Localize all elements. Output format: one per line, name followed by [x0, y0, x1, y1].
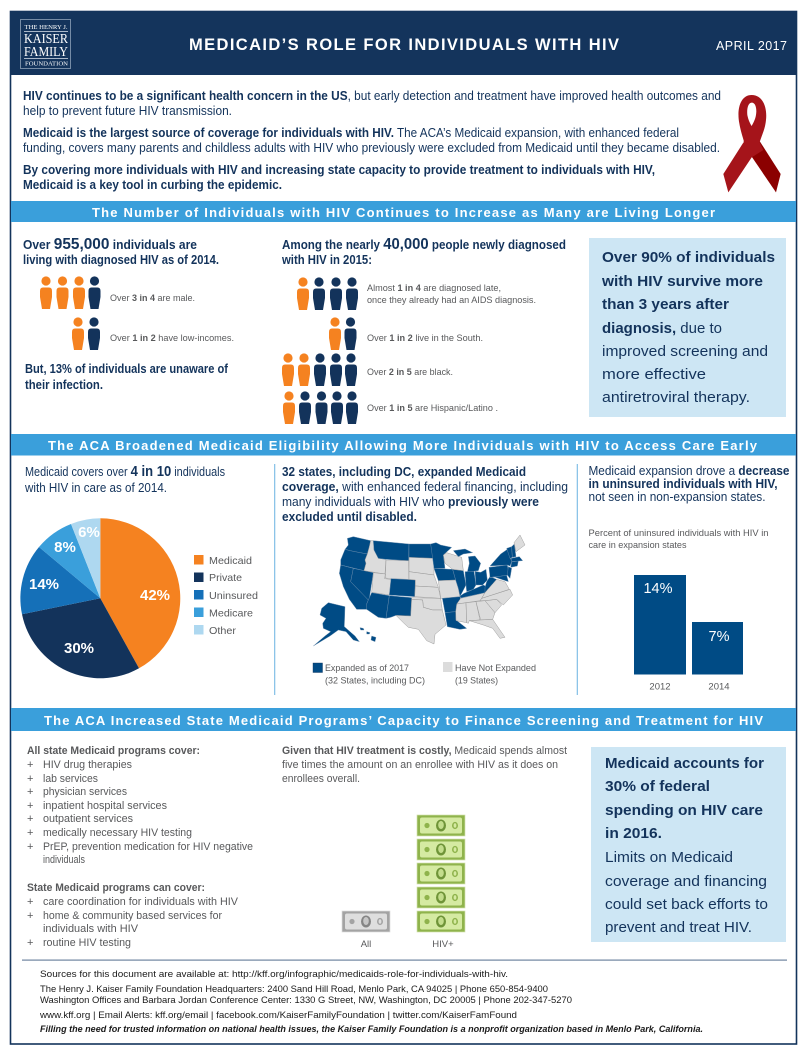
pictogram: 1 in 2 low-income — [72, 317, 234, 350]
section heading: number of individuals — [11, 201, 796, 222]
footer: sources and contacts: The Henry J. Kaiser Family Foundation Headquarters: 2400 Sand Hill Road, Menlo Park, CA 94025 | Phone 650-854-9400 — [40, 984, 548, 995]
intro text block: By covering more individuals with HIV and increasing state capacity to provide treatment to individuals with HIV, — [23, 163, 655, 177]
footer: sources and contacts — [39, 969, 703, 1035]
text: 32 states expanded: coverage, with enhanced federal financing, including — [282, 480, 568, 494]
bar chart: uninsured — [634, 575, 743, 692]
list: all state programs cover: + — [27, 841, 33, 853]
list: all state programs cover: + — [27, 759, 33, 771]
section heading: state capacity: The ACA Increased State Medicaid Programs’ Capacity to Finance Screening and Treatment for HIV — [44, 713, 763, 728]
text: 4 in 10 — [24, 463, 225, 495]
list: state programs can cover: individuals with HIV — [43, 923, 139, 935]
callout: 30% of federal spending: prevent and treat HIV. — [605, 919, 752, 936]
list: all state programs cover: lab services — [43, 773, 98, 785]
pictogram: 2 in 5 black: Over 2 in 5 are black. — [367, 367, 453, 378]
callout: 30% of federal spending: spending on HIV care — [605, 802, 763, 819]
bar chart caption: Percent of uninsured individuals with HIV in — [588, 528, 768, 539]
logo: Kaiser Family Foundation: FOUNDATION — [25, 62, 69, 68]
logo: Kaiser Family Foundation: KAISER — [24, 32, 69, 47]
map legend: Have Not Expanded — [455, 663, 536, 674]
text: 40,000 newly diagnosed — [281, 236, 566, 267]
US map: Medicaid expansion — [313, 535, 525, 646]
text: 13% unaware: But, 13% of individuals are unaware of — [25, 362, 229, 376]
list: all state programs cover: All state Medicaid programs cover: — [27, 745, 200, 757]
callout: 90% survive: Over 90% of individuals — [602, 249, 775, 266]
footer: sources and contacts: Washington Offices and Barbara Jordan Conference Center: 1330 G Street, NW, Washington, DC 20005 | Phone 202-347-5270 — [40, 995, 572, 1006]
text: treatment cost — [282, 745, 567, 785]
pie chart: coverage — [20, 518, 180, 678]
icon: red AIDS ribbon — [723, 95, 781, 192]
map legend: Expanded as of 2017 — [325, 663, 409, 674]
text: 32 states expanded — [282, 465, 568, 524]
bar chart: uninsured: 2012 — [649, 682, 671, 692]
text: 4 in 10: with HIV in care as of 2014. — [24, 481, 167, 495]
pie chart: coverage: 42% — [140, 587, 170, 604]
list: all state programs cover: PrEP, prevention medication for HIV negative — [43, 841, 253, 853]
list: all state programs cover: + — [27, 786, 33, 798]
callout: 90% survive — [589, 238, 786, 417]
list: all state programs cover: individuals — [43, 854, 85, 866]
text: decrease in uninsured: not seen in non-expansion states. — [588, 490, 766, 504]
callout: 90% survive: with HIV survive more — [601, 273, 763, 290]
callout: 90% survive: more effective — [602, 366, 706, 383]
pictogram: 3 in 4 male: Over 3 in 4 are male. — [110, 293, 195, 304]
pictogram: 1 in 4 diagnosed late: once they already had an AIDS diagnosis. — [367, 295, 536, 306]
bar chart caption — [588, 528, 768, 551]
pie legend — [194, 555, 258, 637]
list: state programs can cover — [27, 882, 239, 949]
list: state programs can cover: home & community based services for — [43, 910, 222, 922]
intro text block: Medicaid is a key tool in curbing the epidemic. — [23, 178, 282, 192]
pictogram: 3 in 4 male — [40, 276, 195, 309]
map legend: (32 States, including DC) — [325, 676, 425, 686]
text: 13% unaware — [25, 362, 229, 392]
callout: 30% of federal spending: could set back efforts to — [605, 896, 768, 913]
text: treatment cost: Given that HIV treatment is costly, Medicaid spends almost — [282, 745, 567, 757]
callout: 90% survive: improved screening and — [602, 343, 768, 360]
pie legend: Medicaid — [209, 555, 252, 567]
icon chart: dollar bills — [342, 815, 465, 950]
pie chart: coverage: 8% — [54, 539, 76, 556]
icon chart: dollar bills: All — [361, 939, 371, 950]
text: 40,000 newly diagnosed: Among the nearly 40,000 people newly diagnosed — [282, 236, 566, 253]
list: all state programs cover: outpatient services — [43, 813, 133, 825]
footer: sources and contacts: Sources for this document are available at: http://kff.org/infographic/medicaids-role-for-individuals-with-hiv. — [40, 969, 508, 980]
list: state programs can cover: State Medicaid programs can cover: — [27, 882, 205, 894]
text: 955,000 individuals: living with diagnosed HIV as of 2014. — [23, 253, 219, 267]
callout: 30% of federal spending: Medicaid accounts for — [605, 755, 764, 772]
text: decrease in uninsured: in uninsured individuals with HIV, — [588, 477, 778, 491]
logo: Kaiser Family Foundation — [20, 20, 70, 68]
text: 32 states expanded: excluded until disabled. — [282, 510, 417, 524]
date: APRIL 2017 — [716, 39, 787, 53]
list: all state programs cover — [27, 745, 253, 866]
intro text block — [23, 89, 721, 192]
text: 4 in 10: Medicaid covers over 4 in 10 individuals — [25, 463, 225, 480]
pictogram: 1 in 2 South: Over 1 in 2 live in the South. — [367, 333, 483, 344]
callout: 30% of federal spending: Limits on Medicaid — [605, 849, 733, 866]
text: 32 states expanded: 32 states, including DC, expanded Medicaid — [282, 465, 526, 479]
map legend: (19 States) — [455, 676, 498, 686]
pictogram: 1 in 4 diagnosed late — [297, 277, 536, 310]
list: state programs can cover: routine HIV testing — [43, 937, 131, 949]
pictogram: 1 in 2 low-income: Over 1 in 2 have low-incomes. — [110, 333, 234, 344]
intro text block: funding, covers many parents and childless adults with HIV who previously were excluded from Medicaid until they became disabled. — [23, 141, 720, 155]
pictogram: 1 in 4 diagnosed late: Almost 1 in 4 are diagnosed late, — [367, 283, 501, 294]
list: state programs can cover: + — [27, 896, 33, 908]
list: all state programs cover: + — [27, 827, 33, 839]
logo: Kaiser Family Foundation: THE HENRY J. — [24, 24, 68, 31]
text: 13% unaware: their infection. — [25, 378, 103, 392]
text: 32 states expanded: many individuals with HIV who previously were — [282, 495, 539, 509]
pie legend: Medicare — [209, 608, 253, 620]
list: all state programs cover: + — [27, 800, 33, 812]
intro text block: HIV continues to be a significant health concern in the US, but early detection and treatment have improved health outcomes and — [23, 89, 721, 103]
text: decrease in uninsured — [588, 464, 790, 504]
list: all state programs cover: + — [27, 813, 33, 825]
text: 955,000 individuals: Over 955,000 individuals are — [23, 236, 197, 253]
pictogram: 1 in 2 South — [329, 317, 483, 350]
title: MEDICAID’S ROLE FOR INDIVIDUALS WITH HIV — [189, 36, 619, 54]
map legend — [313, 662, 536, 686]
list: state programs can cover: care coordination for individuals with HIV — [43, 896, 239, 908]
callout: 90% survive: antiretroviral therapy. — [602, 389, 750, 406]
section heading: eligibility: The ACA Broadened Medicaid Eligibility Allowing More Individuals with HIV to Access Care Early — [48, 438, 758, 453]
footer: sources and contacts: Filling the need for trusted information on national health issues, the Kaiser Family Foundation is a nonprofit organization based in Menlo Park, California. — [40, 1024, 703, 1035]
pie legend: Other — [209, 625, 237, 637]
section heading: state capacity — [11, 708, 796, 731]
pie chart: coverage: 6% — [78, 524, 100, 541]
callout: 30% of federal spending: in 2016. — [605, 825, 662, 842]
pictogram: 1 in 5 Hispanic/Latino: Over 1 in 5 are Hispanic/Latino . — [367, 403, 498, 414]
bar chart: uninsured: 2014 — [708, 682, 730, 692]
list: all state programs cover: inpatient hospital services — [43, 800, 167, 812]
text: treatment cost: enrollees overall. — [282, 773, 360, 785]
icon chart: dollar bills: HIV+ — [432, 939, 454, 950]
bar chart: uninsured: 7% — [709, 629, 730, 645]
callout: 90% survive: diagnosis, due to — [602, 320, 722, 337]
header banner — [10, 11, 797, 75]
intro text block: Medicaid is the largest source of coverage for individuals with HIV. The ACA’s Medicaid expansion, with enhanced federal — [23, 126, 679, 140]
list: state programs can cover: + — [27, 937, 33, 949]
list: all state programs cover: HIV drug therapies — [43, 759, 132, 771]
pie legend: Uninsured — [209, 590, 258, 602]
text: treatment cost: five times the amount on an enrollee with HIV as it does on — [282, 759, 558, 771]
list: all state programs cover: medically necessary HIV testing — [43, 827, 192, 839]
intro text block: help to prevent future HIV transmission. — [23, 104, 232, 118]
callout: 90% survive: than 3 years after — [602, 296, 729, 313]
section heading: eligibility — [11, 434, 796, 456]
text: 955,000 individuals — [23, 236, 219, 267]
pie legend: Private — [209, 572, 242, 584]
footer: sources and contacts: www.kff.org | Email Alerts: kff.org/email | facebook.com/KaiserFamilyFoundation | twitter.com/KaiserFamFound — [39, 1010, 517, 1021]
callout: 30% of federal spending: 30% of federal — [605, 778, 710, 795]
list: all state programs cover: physician services — [43, 786, 127, 798]
bar chart caption: care in expansion states — [588, 540, 687, 551]
callout: 30% of federal spending — [591, 747, 786, 942]
text: 40,000 newly diagnosed: with HIV in 2015: — [281, 253, 372, 267]
text: decrease in uninsured: Medicaid expansion drove a decrease — [588, 464, 790, 478]
bar chart: uninsured: 14% — [643, 581, 673, 597]
logo: Kaiser Family Foundation: FAMILY — [24, 45, 68, 60]
pictogram: 1 in 5 Hispanic/Latino — [283, 391, 498, 424]
list: all state programs cover: + — [27, 773, 33, 785]
pie chart: coverage: 30% — [64, 640, 94, 657]
pie chart: coverage: 14% — [29, 576, 59, 593]
callout: 30% of federal spending: coverage and financing — [605, 873, 767, 890]
section heading: number of individuals: The Number of Individuals with HIV Continues to Increase as Many are Living Longer — [92, 205, 715, 220]
list: state programs can cover: + — [27, 910, 33, 922]
pictogram: 2 in 5 black — [282, 353, 453, 386]
